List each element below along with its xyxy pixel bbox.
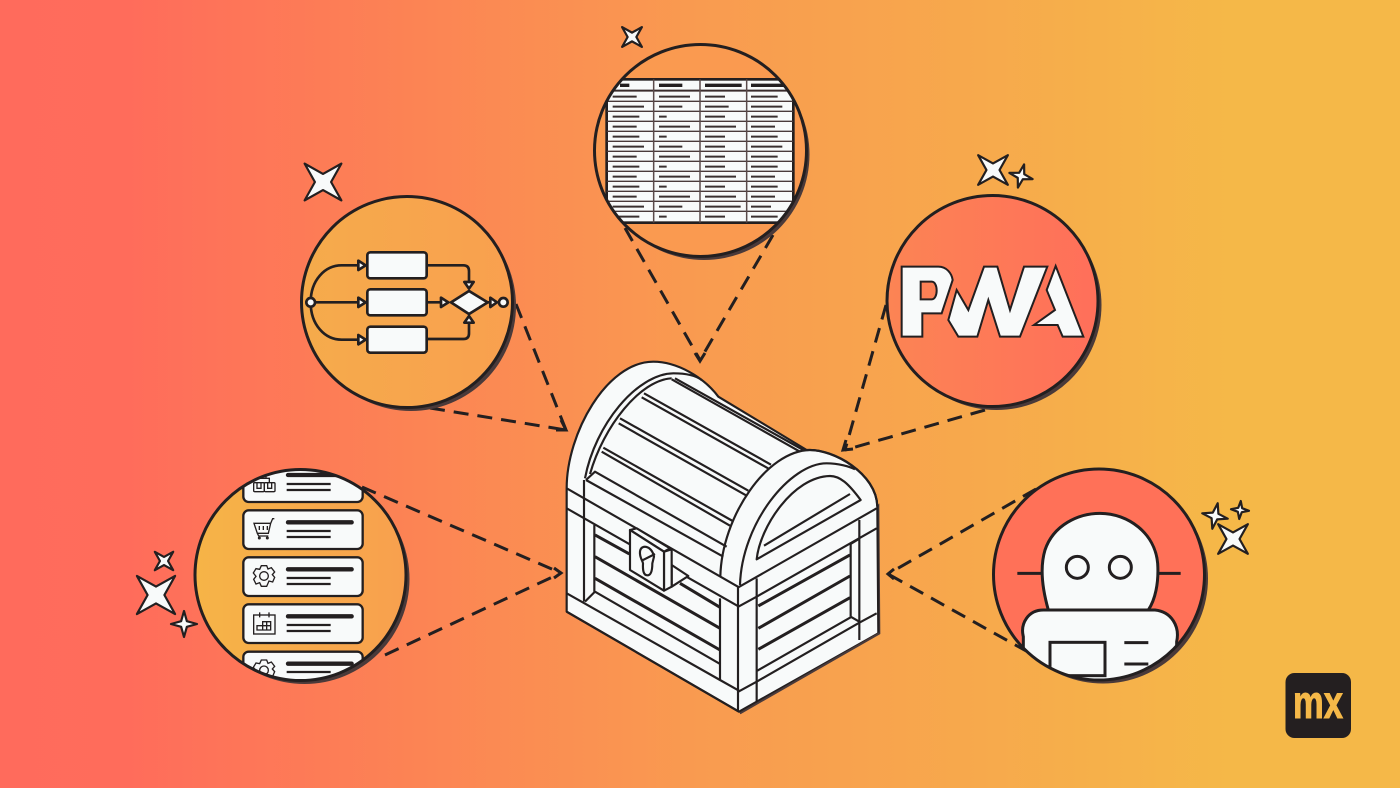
panel: process flow circle xyxy=(302,196,516,411)
sparkle: table xyxy=(612,17,652,57)
panel: robot circle xyxy=(994,469,1208,693)
sparkle: robot small xyxy=(1230,500,1250,520)
logo: mx: mx xyxy=(1293,676,1343,728)
sparkle: list large xyxy=(118,557,194,633)
chest right face frame xyxy=(738,508,877,702)
chest lid right arch xyxy=(720,450,877,585)
arrowheads at chest xyxy=(554,353,894,579)
list cards xyxy=(242,471,364,679)
icon: calendar xyxy=(254,612,275,634)
chest bottom shadow line xyxy=(740,633,879,713)
keyhole xyxy=(640,547,655,575)
chest body silhouette xyxy=(567,362,878,712)
panel: PWA circle xyxy=(887,196,1102,410)
chest lid left arch xyxy=(584,373,803,557)
arrowhead group xyxy=(554,353,894,579)
sparkle: PWA small xyxy=(1006,161,1036,191)
sparkle: process xyxy=(286,145,360,219)
sparkle: list small bottom xyxy=(171,611,197,637)
chest lock plate xyxy=(630,528,688,591)
dashed connectors xyxy=(362,228,1036,655)
logo: mx xyxy=(1286,673,1351,738)
table xyxy=(607,79,793,223)
treasure chest xyxy=(567,362,880,714)
chest front planks xyxy=(595,535,720,650)
process flow diagram xyxy=(306,252,508,353)
panel: table circle xyxy=(594,44,810,260)
connector: table circle to chest xyxy=(625,228,773,360)
icon: bags xyxy=(254,476,275,492)
sparkle: PWA large xyxy=(963,140,1023,200)
sparkles xyxy=(118,17,1263,637)
robot xyxy=(1017,513,1181,693)
connector: PWA circle to chest xyxy=(845,305,985,450)
connector: robot circle to chest xyxy=(888,489,1036,652)
sparkle: robot large xyxy=(1203,509,1263,569)
icon: gear partial xyxy=(252,659,276,676)
panel: list circle xyxy=(195,453,410,690)
icon: shopping cart xyxy=(254,519,274,539)
chest right planks xyxy=(758,555,850,649)
connector: process circle to chest xyxy=(430,304,566,430)
connector: list circle to chest xyxy=(362,487,561,655)
chest front face frame xyxy=(567,488,739,712)
sparkle: list small top xyxy=(146,543,182,579)
icon: gear xyxy=(253,566,275,586)
PWA logo xyxy=(902,266,1083,337)
sparkle: robot medium xyxy=(1200,501,1230,531)
